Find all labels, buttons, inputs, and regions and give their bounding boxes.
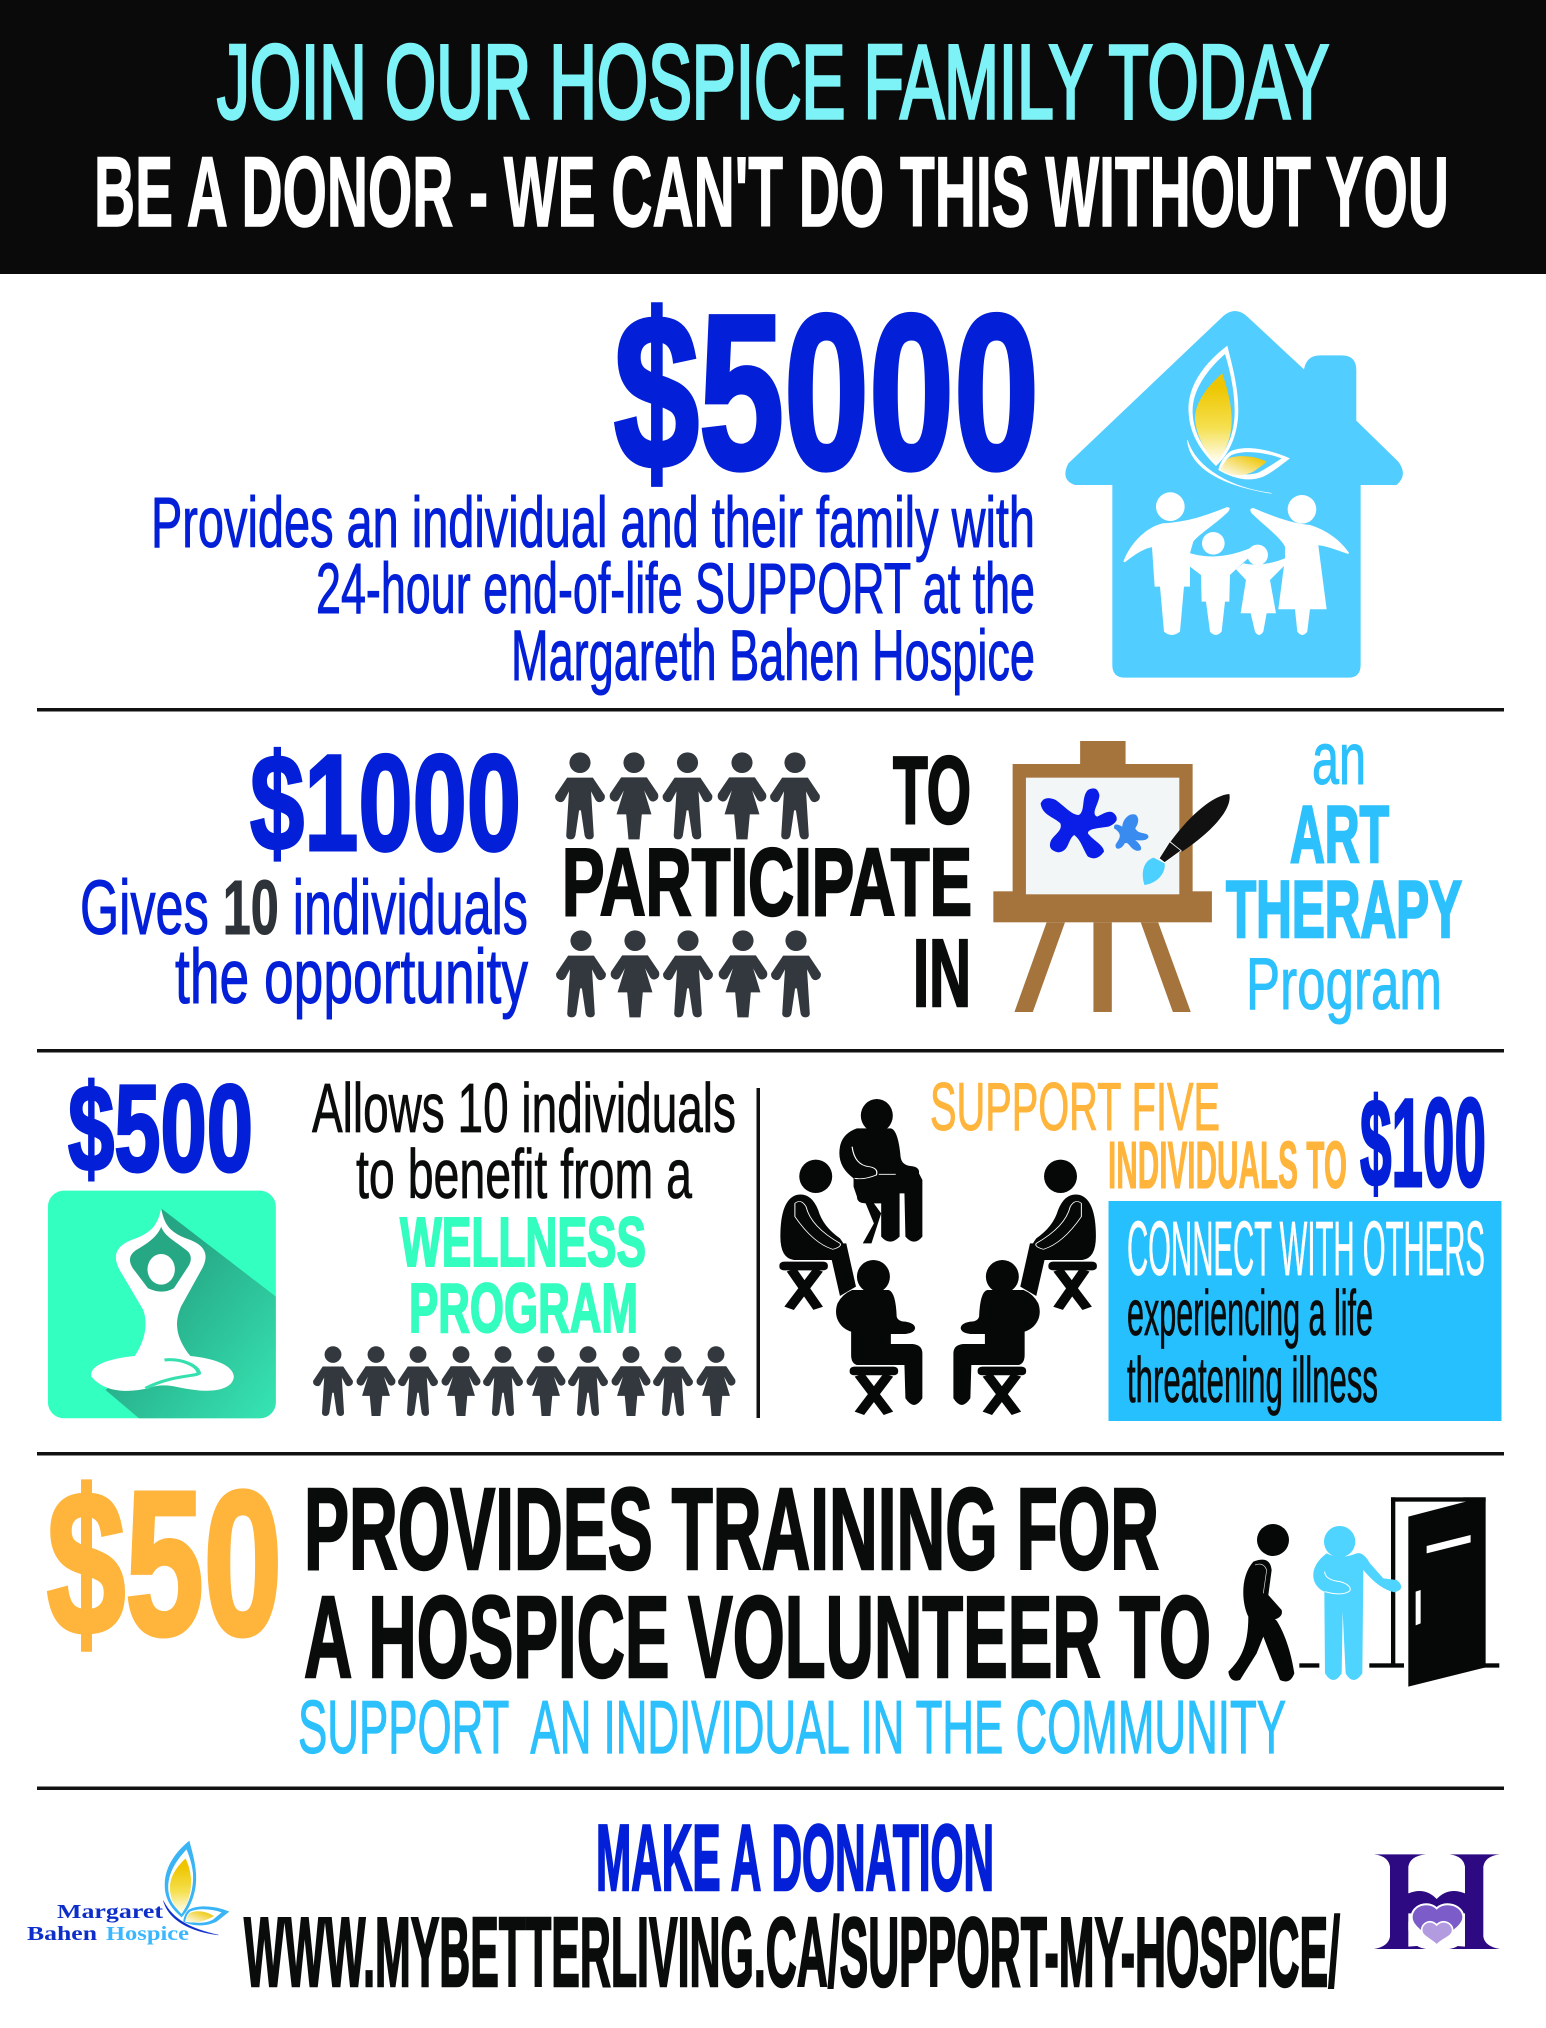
icon: volunteer at door	[1228, 1497, 1499, 1687]
description: the opportunity	[175, 934, 528, 1020]
icon: house with family and butterfly	[1065, 311, 1403, 678]
amount: $500	[68, 1061, 253, 1198]
program name	[400, 1203, 646, 1347]
amount: $1000	[250, 727, 521, 880]
icon: easel with paint brush	[993, 741, 1230, 1012]
logo: Margaret Bahen Hospice: Hospice	[106, 1923, 189, 1945]
description: 24-hour end-of-life SUPPORT at the	[316, 550, 1035, 629]
panel: $5000	[151, 269, 1403, 696]
logo: H with hearts	[1374, 1854, 1500, 1949]
panel: $500 wellness	[48, 1061, 736, 1420]
text: an art therapy program: an	[1312, 719, 1366, 800]
description: Margareth Bahen Hospice	[511, 617, 1035, 696]
text: to participate in: TO	[893, 737, 971, 844]
description: Provides an individual and their family with	[151, 484, 1035, 563]
callout box	[1108, 1201, 1502, 1421]
icon: top row of people	[555, 752, 820, 839]
program name: PROGRAM	[409, 1269, 638, 1347]
logo: Margaret Bahen Hospice: Margaret	[57, 1901, 163, 1923]
heading	[304, 1464, 1211, 1702]
description	[151, 484, 1035, 696]
text: support five individuals to	[930, 1069, 1347, 1203]
description: to benefit from a	[356, 1135, 692, 1213]
text: to participate in: PARTICIPATE	[562, 829, 972, 936]
text: an art therapy program: Program	[1246, 944, 1442, 1025]
description: Gives 10 individuals	[80, 865, 528, 951]
panel: $1000 art therapy	[80, 719, 1462, 1027]
description	[312, 1069, 736, 1213]
logo: Margaret Bahen Hospice	[27, 1841, 229, 1945]
description	[80, 865, 528, 1020]
icon: five seated people	[779, 1099, 1097, 1413]
panel: footer call to action	[27, 1805, 1500, 2007]
amount: $5000	[614, 269, 1039, 515]
text: to participate in: IN	[913, 920, 971, 1027]
panel: $100 support group	[779, 1069, 1502, 1421]
icon: bottom row of people	[556, 930, 821, 1017]
program name: WELLNESS	[400, 1203, 646, 1281]
panel: $50 volunteer training	[47, 1449, 1499, 1769]
text: an art therapy program	[1226, 719, 1462, 1025]
text: to participate in	[562, 737, 972, 1027]
header banner	[0, 0, 1546, 274]
panel: footer call to action: MAKE A DONATION	[596, 1805, 994, 1910]
icon: yoga app tile	[48, 1191, 276, 1420]
icon: ten people	[313, 1346, 735, 1416]
description: Allows 10 individuals	[312, 1069, 736, 1147]
text: support five individuals to: SUPPORT FIVE	[930, 1069, 1220, 1145]
text: an art therapy program: ART	[1290, 790, 1389, 880]
logo: Margaret Bahen Hospice: Bahen	[27, 1923, 97, 1945]
amount: $50	[47, 1449, 282, 1678]
